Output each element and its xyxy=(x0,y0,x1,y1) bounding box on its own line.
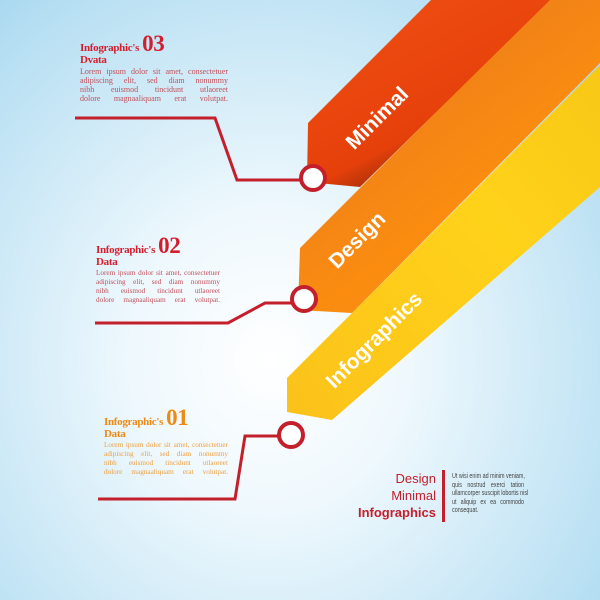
ribbon: infographics xyxy=(287,65,600,420)
ribbon: design xyxy=(298,0,600,313)
legend bar xyxy=(442,470,445,522)
text block 01: Infographic's01 xyxy=(104,405,188,430)
text block 02: Data xyxy=(96,256,117,268)
text block 03: Infographic's03 xyxy=(80,31,164,56)
text block 02: adipiscing elit, sed diam nonummy xyxy=(96,278,220,286)
text block 03: Lorem ipsum dolor sit amet, consectetuer xyxy=(80,67,228,76)
connector 02 xyxy=(95,287,316,323)
bottom-right legend xyxy=(358,470,528,522)
text block 03: adipiscing elit, sed diam nonummy xyxy=(80,76,228,85)
text block 03: dolore magnaaliquam erat volutpat. xyxy=(80,94,228,103)
legend paragraph: consequat. xyxy=(452,505,478,514)
text block 01: dolore magnaaliquam erat volutpat. xyxy=(104,468,228,476)
text block 01: Lorem ipsum dolor sit amet, consectetuer xyxy=(104,441,228,449)
connector 01 xyxy=(98,423,303,499)
legend titles: Infographics xyxy=(358,505,436,520)
legend paragraph: ut aliquip ex ea commodo xyxy=(452,497,524,506)
connector 03 xyxy=(75,118,325,190)
legend paragraph: quis nostrud exerci tation xyxy=(452,480,524,489)
text block 02: dolore magnaaliquam erat volutpat. xyxy=(96,296,220,304)
text block 02: nibh euismod tincidunt utlaoreet xyxy=(96,287,220,295)
legend paragraph: ullamcorper suscipit lobortis nisl xyxy=(452,488,528,497)
legend paragraph xyxy=(452,471,528,514)
text block 01: nibh euismod tincidunt utlaoreet xyxy=(104,459,228,467)
text block 02: Infographic's02 xyxy=(96,233,180,258)
text block 01 xyxy=(104,405,228,476)
legend titles xyxy=(358,471,436,520)
ribbon label: Design: Design xyxy=(324,207,390,273)
legend titles: Design xyxy=(396,471,436,486)
text block 01: adipiscing elit, sed diam nonummy xyxy=(104,450,228,458)
text block 03: Dvata xyxy=(80,54,107,66)
legend paragraph: Ut wisi enim ad minim veniam, xyxy=(452,471,525,480)
text block 02 xyxy=(96,233,220,304)
legend titles: Minimal xyxy=(391,488,436,503)
text block 02: Lorem ipsum dolor sit amet, consectetuer xyxy=(96,269,220,277)
ribbon label: Minimal: Minimal xyxy=(342,83,413,154)
ribbon label: Infographics: Infographics xyxy=(322,288,427,393)
ribbon: minimal xyxy=(307,0,550,187)
text block 01: Data xyxy=(104,428,125,440)
text block 03: nibh euismod tincidunt utlaoreet xyxy=(80,85,228,94)
text block 03 xyxy=(80,31,228,103)
